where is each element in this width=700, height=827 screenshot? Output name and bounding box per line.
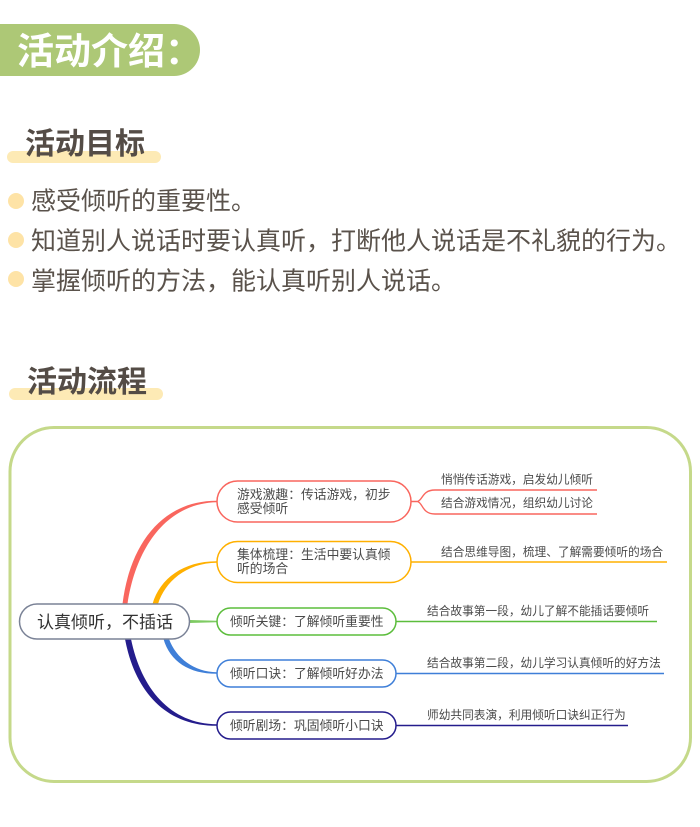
node 1: 游戏激趣 <box>217 481 411 522</box>
branch: orange <box>152 561 217 604</box>
leaf: node 5: 师幼共同表演，利用倾听口诀纠正行为 <box>427 708 626 722</box>
goal 1: 感受倾听的重要性。 <box>31 188 256 216</box>
branch: red <box>122 501 217 604</box>
node 2: 集体梳理: 听的场合 <box>237 561 288 576</box>
leaves: node 1 fork: 悄悄传话游戏，启发幼儿倾听 <box>441 472 593 486</box>
banner: 活动介绍: 活动介绍： <box>17 31 202 72</box>
leaves: node 1 fork <box>411 472 597 514</box>
panel: mind map <box>10 428 690 782</box>
branch: green <box>189 620 217 623</box>
node 3: 倾听关键 <box>217 608 396 635</box>
panel border <box>10 428 690 782</box>
branch: blue <box>164 639 217 674</box>
node 2: 集体梳理: 集体梳理：生活中要认真倾 <box>237 547 391 562</box>
heading: 活动目标: 活动目标 <box>25 128 145 161</box>
node 3: 倾听关键: 倾听关键：了解倾听重要性 <box>230 614 384 629</box>
branch: navy <box>125 639 217 726</box>
heading: 活动流程: 活动流程 <box>27 366 147 399</box>
node 2: 集体梳理 <box>217 542 411 582</box>
node 5: 倾听剧场 <box>217 712 396 739</box>
central node: 认真倾听，不插话 <box>37 613 173 632</box>
goal 2: 知道别人说话时要认真听，打断他人说话是不礼貌的行为。 <box>31 228 681 256</box>
leaf: node 3: 结合故事第一段，幼儿了解不能插话要倾听 <box>427 604 649 618</box>
node 1: 游戏激趣: 感受倾听 <box>237 501 288 516</box>
leaf: node 4: 结合故事第二段，幼儿学习认真倾听的好方法 <box>427 656 661 670</box>
goal 3: 掌握倾听的方法，能认真听别人说话。 <box>31 268 456 296</box>
leaf: node 2: 结合思维导图，梳理、了解需要倾听的场合 <box>441 545 663 559</box>
central node <box>20 604 190 639</box>
node 1: 游戏激趣: 游戏激趣：传话游戏，初步 <box>237 487 391 502</box>
list: activity goals <box>8 188 681 296</box>
node 4: 倾听口诀 <box>217 660 396 687</box>
node 5: 倾听剧场: 倾听剧场：巩固倾听小口诀 <box>230 718 384 733</box>
leaves: node 1 fork: 结合游戏情况，组织幼儿讨论 <box>441 496 593 510</box>
node 4: 倾听口诀: 倾听口诀：了解倾听好办法 <box>230 666 384 681</box>
